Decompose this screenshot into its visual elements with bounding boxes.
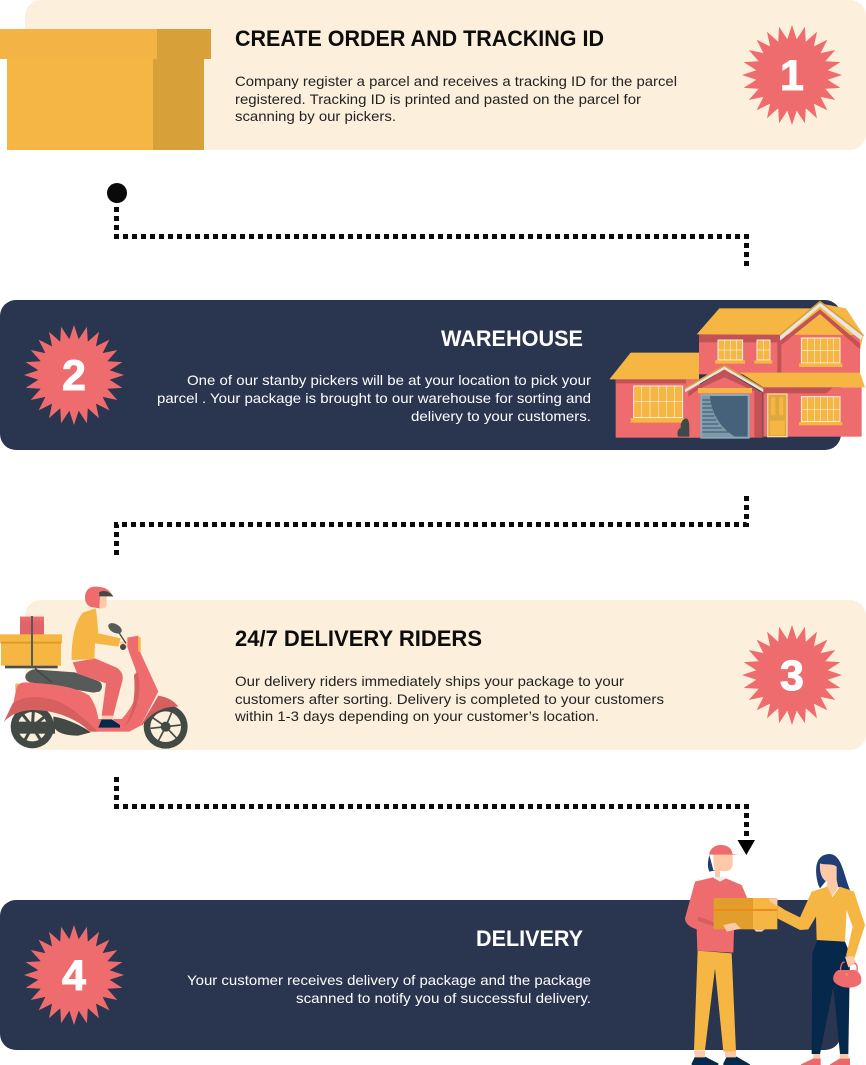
badge: number 3: 3	[780, 652, 804, 700]
text: step 1 description: registered. Tracking ID is printed and pasted on the parcel for	[235, 91, 641, 107]
text: step 2 description: parcel . Your package is brought to our warehouse for sorting and	[157, 390, 591, 406]
badge: number 3	[742, 625, 842, 725]
handbag	[833, 962, 861, 988]
icon: cardboard box	[0, 29, 211, 150]
text: step 3 description: within 1-3 days depending on your customer’s location.	[234, 708, 599, 724]
illustration: courier hands parcel to customer	[685, 845, 865, 1065]
rider	[72, 587, 127, 728]
panel: step 3 delivery riders	[0, 587, 866, 750]
door	[768, 394, 787, 437]
right wing	[740, 373, 865, 437]
badge: number 4: 4	[62, 952, 86, 1000]
scooter body	[4, 636, 158, 732]
customer	[769, 854, 865, 1065]
heading: delivery: DELIVERY	[476, 926, 583, 951]
text: step 4 description	[187, 972, 591, 1006]
heading: create order: CREATE ORDER AND TRACKING ID	[235, 26, 604, 51]
illustration: house	[609, 301, 865, 438]
text: step 3 description: Our delivery riders immediately ships your package to your	[235, 673, 624, 689]
delivery boxes	[0, 616, 62, 668]
text: step 2 description: delivery to your customers.	[411, 408, 591, 424]
heading: delivery riders: 24/7 DELIVERY RIDERS	[235, 626, 482, 651]
handlebar and mirror	[106, 621, 126, 650]
centre gable	[685, 365, 763, 438]
illustration: scooter rider	[0, 587, 188, 749]
badge: number 2: 2	[62, 352, 86, 400]
connector: step 3 to 4 with arrowhead	[116, 777, 755, 855]
connector: step 2 to 3	[116, 496, 746, 555]
badge: number 1: 1	[780, 52, 804, 100]
parcel	[714, 898, 777, 932]
connector: step 1 to 2	[107, 183, 746, 266]
text: step 1 description: scanning by our pickers.	[235, 108, 396, 124]
panel: step 1 create order	[0, 0, 866, 150]
bush	[677, 418, 689, 437]
panel: step 2 warehouse	[0, 300, 865, 450]
garage door	[701, 395, 749, 438]
left wing	[609, 353, 700, 438]
badge: number 4	[24, 925, 124, 1025]
upper storey	[697, 301, 864, 374]
text: step 4 description: scanned to notify you of successful delivery.	[296, 990, 591, 1006]
panel: step 4 delivery	[0, 845, 865, 1065]
badge: number 1	[742, 25, 842, 125]
text: step 2 description: One of our stanby pickers will be at your location to pick your	[187, 372, 591, 388]
text: step 4 description: Your customer receives delivery of package and the package	[187, 972, 591, 988]
text: step 1 description	[235, 73, 677, 124]
seat	[25, 669, 102, 693]
heading: warehouse: WAREHOUSE	[441, 326, 583, 351]
courier	[685, 845, 750, 1065]
wheels	[11, 705, 188, 749]
text: step 3 description	[234, 673, 664, 724]
text: step 2 description	[157, 372, 591, 424]
badge: number 2	[24, 325, 124, 425]
text: step 1 description: Company register a parcel and receives a tracking ID for the parcel	[235, 73, 677, 89]
windows	[631, 338, 842, 425]
text: step 3 description: customers after sorting. Delivery is completed to your customers	[235, 691, 664, 707]
